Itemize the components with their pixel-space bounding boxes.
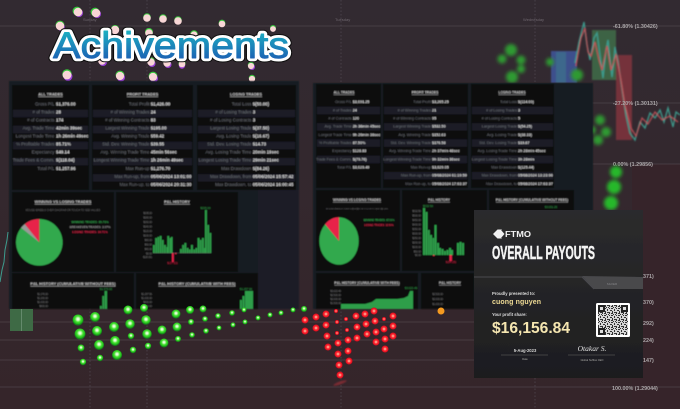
card: all trades right: Total P/L bbox=[337, 166, 352, 170]
card: cumulative without fees bbox=[12, 273, 134, 309]
card: all trades: # of Contracts bbox=[27, 118, 55, 122]
card: losing trades right: Total Loss bbox=[500, 100, 517, 104]
card: profit trades: 24 bbox=[151, 110, 156, 114]
card: P&L history chart right: $100.00 bbox=[412, 246, 422, 249]
card: profit trades right: # of Winning Trades bbox=[398, 108, 431, 112]
FTMO logo bbox=[493, 230, 531, 239]
card: losing trades: LOSING TRADES bbox=[230, 92, 262, 96]
card: profit trades right: Total Profit bbox=[413, 100, 432, 104]
card: cumulative with fees: $1,000.00 bbox=[141, 297, 153, 300]
fibonacci level labels: -27.20% (1.30131) bbox=[613, 101, 658, 107]
card: P&L history chart: $120.00 bbox=[143, 230, 153, 233]
card: P&L history chart right: $250.00 bbox=[412, 237, 422, 240]
card: all trades: 28 bbox=[56, 110, 61, 114]
card: cumulative with fees right: $2,500.00 bbox=[330, 294, 342, 297]
card: profit trades: Largest Winning Trade bbox=[105, 126, 150, 131]
card: losing trades: Total Loss bbox=[232, 101, 252, 106]
card: losing trades: $(37.50) bbox=[253, 126, 270, 131]
card: P&L history chart right: $400.00 bbox=[412, 224, 422, 226]
day labels bbox=[83, 17, 544, 22]
card: cumulative without fees: $800.00 bbox=[39, 305, 49, 308]
card: winning vs losing pie bbox=[12, 192, 114, 272]
card: all trades: Gross P/L bbox=[35, 101, 55, 106]
card: profit trades right: Avg. Winning Trade bbox=[398, 133, 431, 137]
card: cumulative with fees right: $1,500.00 bbox=[330, 302, 342, 305]
card: losing trades: Std. Dev. Losing Trade bbox=[207, 142, 252, 147]
card: profit trades: PROFIT TRADES bbox=[127, 92, 159, 96]
card: losing trades: Max Drawdown, from bbox=[210, 174, 252, 179]
card: losing trades right: Largest Losing Trade bbox=[482, 125, 517, 129]
card: profit trades: Total Profit bbox=[129, 101, 150, 106]
card: losing trades: $(16.67) bbox=[253, 134, 270, 139]
signature bbox=[568, 344, 615, 362]
card: losing trades: 3 bbox=[253, 118, 256, 122]
FTMO certificate bbox=[474, 210, 643, 378]
card: losing trades right: $(125.44) bbox=[518, 166, 535, 170]
card: all trades right bbox=[316, 84, 381, 188]
card: all trades right: ALL TRADES bbox=[334, 90, 355, 94]
card: losing trades: Max Drawdown, to bbox=[215, 182, 252, 187]
card: losing trades right: 3 bbox=[518, 108, 520, 112]
day labels: Tuesday bbox=[335, 17, 350, 22]
FTMO certificate: SILVER bbox=[607, 282, 618, 286]
card: all trades: # of Trades bbox=[33, 110, 55, 114]
card: losing trades right: Max Drawdown, from bbox=[482, 174, 517, 178]
card: all trades right: $128.83 bbox=[353, 149, 366, 153]
card: winning vs losing pie right bbox=[316, 190, 400, 271]
card: all trades right: 87.50% bbox=[353, 141, 366, 145]
QR code bbox=[596, 303, 630, 337]
card: cumulative with fees: $1,257.96 bbox=[141, 293, 153, 296]
card: losing trades: Max Drawdown bbox=[221, 166, 252, 171]
card: P&L history chart right: $50.00 bbox=[414, 250, 422, 254]
card: P&L history chart: $100.00 bbox=[143, 234, 153, 238]
card: P&L history chart: $195.00 bbox=[200, 206, 211, 210]
card: all trades right: 2h 36min 45sec bbox=[353, 125, 380, 129]
fibonacci level labels: 224) bbox=[643, 338, 654, 344]
card: P&L history chart right: $532.50 bbox=[423, 204, 434, 208]
card: P&L history chart: P&L HISTORY bbox=[164, 199, 190, 204]
card: losing trades right: 05/08/2024 17:03:37 bbox=[518, 182, 553, 186]
card: P&L history chart right: $200.00 bbox=[412, 242, 422, 244]
card: losing trades: $(50.00) bbox=[253, 101, 270, 106]
fibonacci level labels: 0.00% (1.29856) bbox=[613, 162, 653, 168]
profit share: Your profit share: bbox=[492, 312, 527, 317]
card: P&L history chart right: P&L HISTORY bbox=[428, 198, 451, 202]
card: cumulative without fees top right: $3,091.25 bbox=[545, 205, 558, 209]
card: cumulative without fees: $1,200.00 bbox=[37, 297, 49, 300]
card: cumulative with fees right: $2,000.00 bbox=[330, 298, 342, 301]
top scattered dots bbox=[56, 7, 276, 83]
card: losing trades right: 3h 28min bbox=[518, 157, 535, 161]
card: all trades bbox=[12, 85, 89, 190]
card: cumulative partial right: P&L HISTORY bbox=[439, 281, 462, 285]
card: losing trades right: 05/08/2024 13:23:00 bbox=[518, 174, 553, 178]
card: losing trades right bbox=[471, 84, 554, 188]
recipient: Proudly presented to: bbox=[492, 291, 535, 296]
card: winning vs losing pie: MOUSE WHEELS OVER DIAGRAM OR TOUCH TO SEE VALUES bbox=[26, 209, 101, 212]
fibonacci level labels: 292) bbox=[643, 321, 654, 327]
date bbox=[501, 348, 548, 361]
card: P&L history chart: $140.00 bbox=[143, 226, 153, 228]
card: all trades: 85.71% bbox=[56, 142, 71, 147]
red smear bbox=[333, 379, 347, 387]
green highlight square bbox=[10, 309, 33, 331]
card: profit trades: 1h 26min 49sec bbox=[151, 158, 184, 163]
card: all trades right: 120 bbox=[353, 116, 359, 120]
card: all trades right: # of Contracts bbox=[328, 116, 352, 120]
card: winning vs losing pie: BREAKEVEN TRADES: 3.57% bbox=[70, 225, 111, 229]
card: all trades: Total P/L bbox=[37, 166, 55, 171]
right dashboard bbox=[313, 83, 593, 309]
signature: Global Suffrax CEO bbox=[581, 358, 603, 362]
card: profit trades right: $3,029.05 bbox=[432, 166, 449, 170]
fibonacci trade chart bbox=[551, 22, 680, 140]
card: all trades right: % Profitable Trades bbox=[319, 141, 352, 145]
card: profit trades: Longest Winning Trade Time bbox=[94, 158, 150, 163]
certificate heading: OVERALL PAYOUTS bbox=[492, 243, 595, 263]
card: profit trades bbox=[92, 85, 193, 190]
card: all trades: Longest Trade Time bbox=[16, 134, 55, 139]
card: profit trades: Avg. Winning Trade bbox=[111, 134, 150, 139]
card: all trades: $(118.04) bbox=[56, 158, 75, 163]
fibonacci level labels bbox=[612, 24, 658, 392]
card: P&L history chart right: $300.00 bbox=[412, 232, 422, 236]
card: all trades: 42min 39sec bbox=[56, 126, 83, 131]
card: losing trades: Avg. Losing Trade Time bbox=[205, 150, 252, 155]
card: winning vs losing pie right: MOUSE WHEELS OVER DIAGRAM OR TOUCH TO SEE VALUES bbox=[326, 208, 389, 210]
card: profit trades: Max Run-up bbox=[126, 166, 150, 171]
card: all trades right: # of Trades bbox=[333, 108, 352, 112]
card: losing trades: 05/06/2024 15:57:42 bbox=[253, 174, 294, 179]
card: profit trades right: 21 bbox=[432, 108, 436, 112]
card: cumulative with fees right: P&L HISTORY (CUMULATIVE WITH FEES) bbox=[334, 281, 400, 285]
card: all trades right: Longest Trade Time bbox=[319, 133, 352, 137]
card: losing trades right: Max Drawdown bbox=[491, 166, 517, 170]
card: losing trades: 05/06/2024 16:00:45 bbox=[253, 182, 294, 187]
card: profit trades right: 9h 32min 36sec bbox=[432, 157, 460, 161]
card: all trades right: $3,091.25 bbox=[353, 100, 369, 104]
title: Achivements bbox=[53, 25, 289, 66]
card: all trades: ALL TRADES bbox=[38, 92, 63, 96]
fibonacci level labels: -61.80% (1.30426) bbox=[613, 24, 658, 30]
card: profit trades: 83 bbox=[151, 118, 156, 122]
card: losing trades right: Longest Losing Trade Time bbox=[472, 157, 517, 161]
card: winning vs losing pie: LOSING TRADES: 10.71% bbox=[72, 230, 108, 234]
card: cumulative without fees top right bbox=[489, 190, 574, 271]
card: P&L history chart: $60.00 bbox=[145, 244, 153, 246]
card: profit trades right: Longest Winning Trade Time bbox=[383, 157, 431, 161]
card: cumulative without fees: $1,376.00 bbox=[100, 287, 113, 291]
card: profit trades: # of Winning Contracts bbox=[105, 118, 150, 122]
card: profit trades right: $3,205.25 bbox=[432, 100, 449, 104]
card: losing trades: # of Losing Contracts bbox=[210, 118, 252, 122]
card: profit trades right: Max Run-up bbox=[411, 166, 431, 170]
card: P&L history chart right: $450.00 bbox=[412, 219, 422, 222]
card: P&L history chart right: $500.00 bbox=[412, 214, 422, 218]
card: profit trades right bbox=[383, 84, 468, 188]
card: cumulative partial right: $1,000.00 bbox=[432, 303, 444, 306]
card: winning vs losing pie: WINNING VS LOSING TRADES bbox=[35, 199, 92, 204]
card: cumulative without fees top right: P&L HISTORY (CUMULATIVE WITHOUT FEES) bbox=[496, 198, 568, 202]
card: winning vs losing pie: WINNING TRADES: 85.71% bbox=[71, 220, 109, 224]
card: all trades: 174 bbox=[56, 118, 64, 122]
card: profit trades: Max Run-up, from bbox=[114, 174, 150, 179]
fibonacci level labels: 100.00% (1.29044) bbox=[612, 386, 658, 392]
card: losing trades: # of Losing Trades bbox=[215, 110, 252, 114]
card: cumulative with fees right: $3,020.49 bbox=[405, 286, 418, 290]
card: cumulative with fees: P&L HISTORY (CUMULATIVE WITH FEES) bbox=[159, 281, 236, 286]
card: profit trades right: 05/08/2024 01:19:59 bbox=[432, 174, 467, 178]
card: cumulative with fees right bbox=[316, 273, 418, 309]
card: all trades right: 24 bbox=[353, 108, 358, 112]
card: losing trades: 29min 21sec bbox=[253, 158, 279, 163]
card: winning vs losing pie right: WINNING VS LOSING TRADES bbox=[333, 198, 382, 202]
card: profit trades right: Largest Winning Trade bbox=[393, 125, 431, 129]
left candles bbox=[0, 232, 8, 282]
card: cumulative without fees: $1,000.00 bbox=[37, 301, 49, 304]
card: P&L history chart right: $350.00 bbox=[412, 228, 422, 231]
card: profit trades right: # of Winning Contracts bbox=[393, 116, 431, 120]
fibonacci level labels: 371) bbox=[643, 274, 654, 280]
card: profit trades right: Max Run-up, from bbox=[401, 174, 431, 178]
card: profit trades: 45min 56sec bbox=[151, 150, 177, 155]
card: all trades: $1,257.96 bbox=[56, 166, 76, 171]
card: P&L history chart right: $(54.25) bbox=[446, 260, 456, 264]
card: P&L history chart: $180.00 bbox=[143, 216, 153, 220]
recipient: cuong nguyen bbox=[492, 299, 541, 306]
card: all trades: $49.14 bbox=[56, 150, 70, 155]
card: P&L history chart: $(20.00) bbox=[143, 256, 152, 259]
green dots bbox=[72, 304, 307, 365]
card: profit trades: Avg. Winning Trade Time bbox=[101, 150, 150, 155]
card: all trades right: 9h 20min 36sec bbox=[353, 133, 380, 137]
card: profit trades: $195.00 bbox=[151, 126, 167, 131]
card: all trades right: $3,020.49 bbox=[353, 166, 369, 170]
card: losing trades right: Avg. Losing Trade bbox=[487, 133, 517, 137]
card: losing trades: Longest Losing Trade Time bbox=[199, 158, 252, 163]
card: losing trades right: $(54.25) bbox=[518, 125, 533, 129]
card: all trades: Trade Fees & Comm. bbox=[13, 158, 54, 163]
card: P&L history chart: $40.00 bbox=[145, 248, 153, 251]
day labels: Sunday bbox=[83, 17, 97, 22]
card: all trades right: Gross P/L bbox=[335, 100, 352, 104]
card: P&L history chart right bbox=[402, 190, 487, 271]
card: P&L history chart: $160.00 bbox=[143, 221, 153, 224]
card: all trades right: $(70.76) bbox=[353, 157, 367, 161]
card: losing trades right: # of Losing Contracts bbox=[482, 116, 517, 120]
card: cumulative without fees: P&L HISTORY (CUMULATIVE WITHOUT FEES) bbox=[30, 281, 116, 286]
card: profit trades: $59.42 bbox=[151, 134, 165, 139]
fibonacci level labels: 370) bbox=[643, 300, 654, 306]
card: profit trades right: $152.63 bbox=[432, 133, 446, 137]
orange dot bbox=[438, 308, 444, 314]
card: cumulative with fees: $1,257.96 bbox=[240, 287, 253, 291]
card: losing trades: Largest Losing Trade bbox=[210, 126, 252, 131]
card: all trades right: Avg. Trade Time bbox=[324, 125, 352, 129]
card: losing trades right: $19.67 bbox=[518, 141, 529, 145]
card: losing trades right: $(38.33) bbox=[518, 133, 533, 137]
card: cumulative partial right: $2,000.00 bbox=[432, 298, 444, 301]
card: losing trades: $14.73 bbox=[253, 142, 267, 147]
card: losing trades right: Avg. Losing Trade Time bbox=[478, 149, 517, 153]
card: losing trades right: $(114.00) bbox=[518, 100, 535, 104]
card: profit trades: Std. Dev. Winning Trade bbox=[102, 142, 150, 147]
card: losing trades: 20min 19sec bbox=[253, 150, 279, 155]
card: losing trades bbox=[197, 85, 296, 190]
card: all trades: 1h 26min 49sec bbox=[56, 134, 89, 139]
card: profit trades right: 95 bbox=[432, 116, 436, 120]
left dashboard bbox=[9, 81, 299, 309]
card: all trades: $1,376.00 bbox=[56, 101, 76, 106]
profit share bbox=[492, 312, 570, 337]
card: losing trades: Avg. Losing Trade bbox=[216, 134, 252, 139]
recipient bbox=[492, 291, 541, 306]
card: profit trades right: $170.58 bbox=[432, 141, 446, 145]
card: profit trades: 05/06/2024 13:01:00 bbox=[151, 174, 192, 179]
card: cumulative with fees right: $3,020.49 bbox=[330, 290, 342, 293]
card: losing trades right: 5 bbox=[518, 116, 520, 120]
card: P&L history chart: $195.00 bbox=[143, 212, 153, 215]
card: cumulative partial right bbox=[421, 273, 474, 309]
fibonacci level labels: 147) bbox=[643, 358, 654, 364]
day labels: Wednesday bbox=[523, 17, 544, 22]
card: P&L history chart: $(37.50) bbox=[167, 261, 178, 265]
card: P&L history chart right: $0.00 bbox=[415, 254, 422, 257]
card: profit trades right: PROFIT TRADES bbox=[412, 90, 439, 94]
card: P&L history chart bbox=[116, 192, 238, 272]
card: cumulative without fees: $1,376.00 bbox=[37, 293, 49, 296]
red dots bbox=[302, 308, 396, 378]
card: all trades: Avg. Trade Time bbox=[23, 126, 55, 131]
card: profit trades: # of Winning Trades bbox=[110, 110, 150, 114]
card: profit trades: Max Run-up, to bbox=[119, 182, 150, 187]
card: profit trades right: Max Run-up, to bbox=[405, 182, 431, 186]
card: all trades: Expectancy bbox=[32, 150, 55, 155]
title: Achivements bbox=[53, 25, 289, 66]
card: cumulative with fees: $600.00 bbox=[143, 305, 153, 308]
title: Achivements bbox=[53, 25, 289, 66]
card: profit trades right: 2h 37min 48sec bbox=[432, 149, 460, 153]
card: losing trades: 3 bbox=[253, 110, 256, 114]
card: all trades right: Trade Fees & Comm. bbox=[316, 157, 352, 161]
card: losing trades right: Std. Dev. Losing Trade bbox=[479, 141, 517, 145]
card: cumulative partial right: $2,500.00 bbox=[432, 293, 444, 296]
card: losing trades right: # of Losing Trades bbox=[486, 108, 517, 112]
card: profit trades right: Avg. Winning Trade Time bbox=[389, 149, 431, 153]
card: P&L history chart right: $532.50 bbox=[412, 210, 422, 213]
card: cumulative with fees: $800.00 bbox=[143, 301, 153, 304]
card: losing trades: $(84.26) bbox=[253, 166, 270, 171]
signature: Otakar S. bbox=[578, 344, 606, 353]
FTMO logo: FTMO bbox=[505, 230, 531, 239]
card: losing trades right: 2h 28min 45sec bbox=[518, 149, 546, 153]
date: 5-Aug-2023 bbox=[514, 348, 537, 353]
blurred green dots, upper right bbox=[498, 44, 622, 210]
card: profit trades right: $532.50 bbox=[432, 125, 446, 129]
card: profit trades: 05/06/2024 20:31:30 bbox=[151, 182, 192, 187]
card: all trades right: Expectancy bbox=[332, 149, 352, 153]
profit share: $16,156.84 bbox=[492, 320, 570, 337]
card: losing trades right: LOSING TRADES bbox=[498, 90, 526, 94]
card: P&L history chart: $80.00 bbox=[145, 239, 153, 242]
card: profit trades right: Std. Dev. Winning Trade bbox=[391, 141, 431, 145]
card: P&L history chart: $0.00 bbox=[146, 252, 153, 256]
card: losing trades right: Max Drawdown, to bbox=[486, 182, 517, 186]
date: Date bbox=[522, 357, 528, 361]
card: winning vs losing pie right: LOSING TRADES: 12.50% bbox=[364, 224, 394, 227]
card: profit trades: $1,276.70 bbox=[151, 166, 171, 171]
card: winning vs losing pie right: WINNING TRADES: 87.50% bbox=[364, 219, 395, 222]
card: profit trades right: 05/08/2024 17:03:37 bbox=[432, 182, 467, 186]
card: cumulative with fees bbox=[136, 273, 258, 309]
card: profit trades: $39.55 bbox=[151, 142, 165, 147]
card: all trades: % Profitable Trades bbox=[16, 142, 55, 147]
card: profit trades: $1,426.00 bbox=[151, 101, 171, 106]
